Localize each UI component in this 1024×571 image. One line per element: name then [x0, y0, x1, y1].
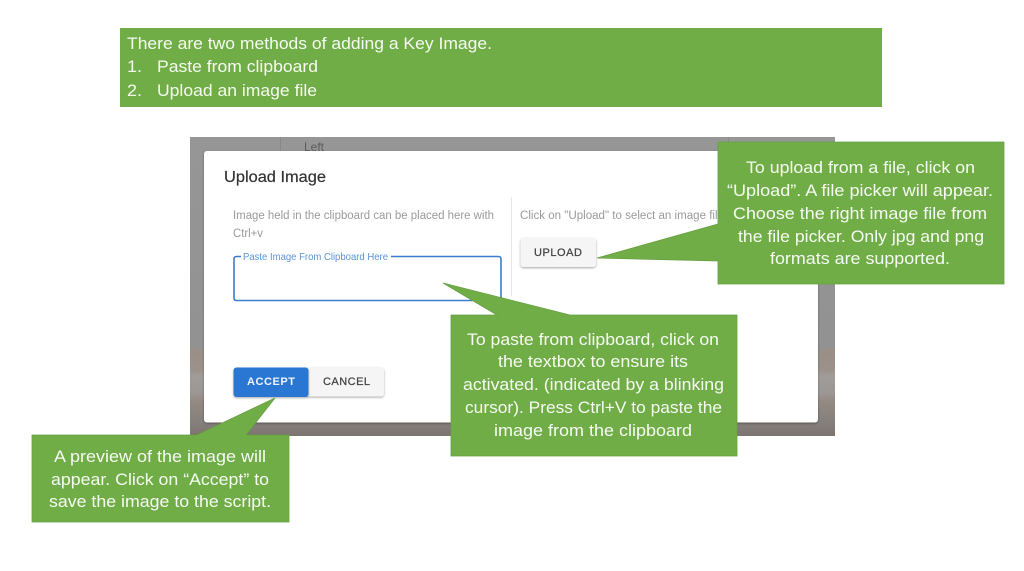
- dialog title: Upload Image: [224, 169, 326, 186]
- banner: two methods of adding a key image: There are two methods of adding a Key Image.: [127, 34, 492, 53]
- callout: upload from a file: To upload from a file, click on: [746, 158, 975, 177]
- callout: upload from a file: formats are supported.: [770, 249, 950, 268]
- callout: upload from a file: the file picker. Only jpg and png: [738, 227, 984, 246]
- accept button: [234, 368, 308, 397]
- callout: accept the image: save the image to the script.: [49, 492, 271, 511]
- callout: paste from clipboard: image from the clipboard: [494, 421, 692, 440]
- callout: upload from a file: “Upload”. A file picker will appear.: [727, 181, 993, 200]
- banner: two methods of adding a key image: Upload an image file: [157, 81, 317, 100]
- callout: paste from clipboard: activated. (indicated by a blinking: [463, 375, 724, 394]
- upload button: UPLOAD: [534, 247, 582, 259]
- cancel button: CANCEL: [323, 376, 370, 388]
- accept button: ACCEPT: [247, 376, 295, 388]
- banner: two methods of adding a key image: [120, 28, 882, 107]
- upload button: [520, 238, 596, 267]
- paste textbox: [234, 252, 501, 300]
- callout: upload from a file: [597, 142, 1004, 284]
- paste textbox: Paste Image From Clipboard Here: [243, 252, 388, 263]
- banner: two methods of adding a key image: Paste from clipboard: [157, 57, 318, 76]
- banner: two methods of adding a key image: 2.: [127, 81, 142, 100]
- callout: accept the image: A preview of the image will: [54, 447, 266, 466]
- screenshot: upload image dialog: Left: [304, 140, 325, 154]
- callout: upload from a file: Choose the right image file from: [733, 204, 987, 223]
- screenshot: upload image dialog: Ctrl+v: [233, 228, 263, 240]
- callout: accept the image: appear. Click on “Accept” to: [51, 470, 269, 489]
- clipboard instructions: Image held in the clipboard can be placed here with: [233, 210, 494, 222]
- upload instructions: Click on "Upload" to select an image file: [520, 210, 724, 222]
- callout: paste from clipboard: [443, 283, 737, 456]
- screenshot: upload image dialog: [190, 137, 835, 436]
- callout: paste from clipboard: the textbox to ensure its: [498, 352, 688, 371]
- cancel button: [306, 368, 384, 396]
- callout: paste from clipboard: cursor). Press Ctrl+V to paste the: [465, 398, 722, 417]
- banner: two methods of adding a key image: 1.: [127, 57, 142, 76]
- callout: paste from clipboard: To paste from clipboard, click on: [467, 330, 719, 349]
- callout: accept the image: [32, 398, 289, 522]
